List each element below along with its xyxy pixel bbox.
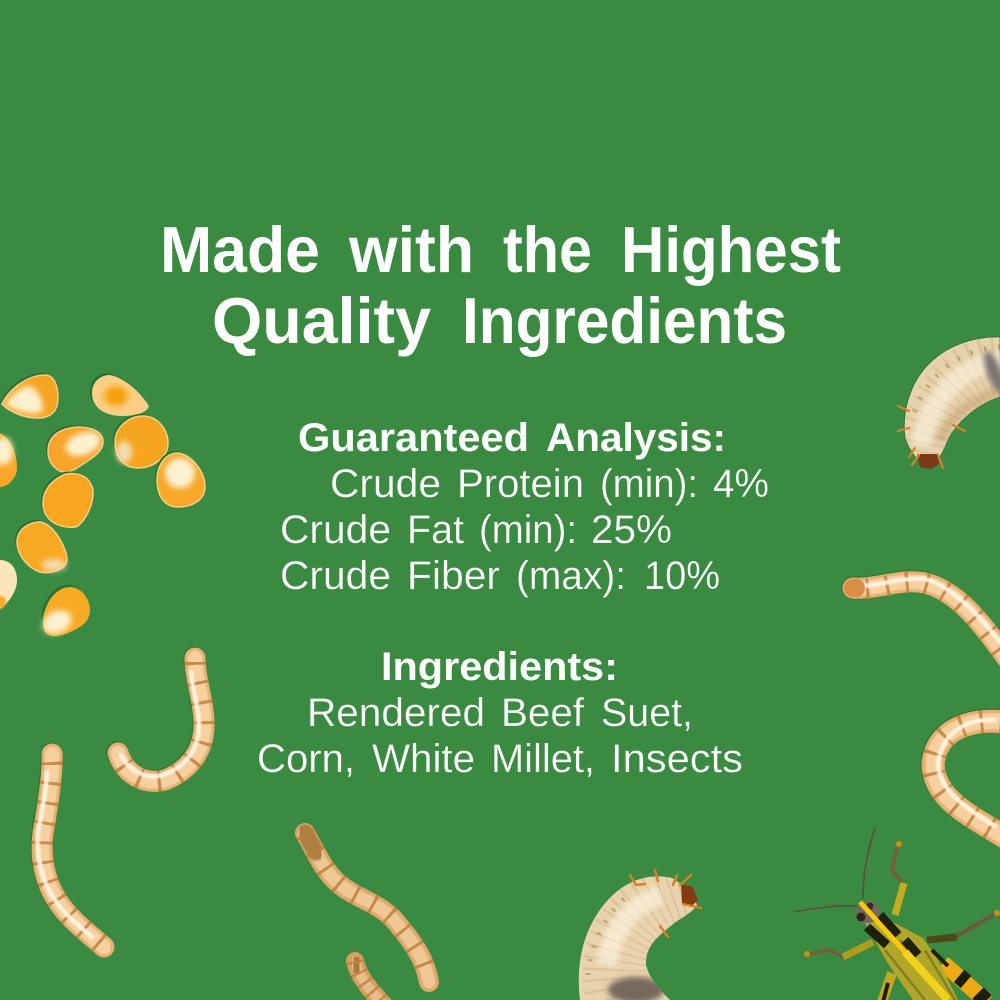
kernel 9 [0, 560, 17, 609]
title: Quality [212, 284, 431, 357]
text block: ingredients: Millet, [491, 737, 595, 781]
text block: guaranteed analysis: Protein [457, 462, 584, 506]
dark stripes [867, 915, 918, 955]
body [865, 917, 958, 1000]
text block: ingredients: Corn, [257, 737, 355, 781]
text block: guaranteed analysis: 10% [644, 554, 720, 598]
kernel 8 [15, 520, 67, 572]
kernel 10 [39, 585, 90, 638]
kernel 7 [0, 433, 17, 487]
title: Highest [621, 213, 841, 286]
grub head [917, 454, 939, 469]
title: with [348, 213, 474, 286]
mealworm: right curled [932, 720, 1000, 838]
text block: guaranteed analysis: (min): [479, 508, 577, 552]
mealworm: J-shaped [117, 657, 204, 781]
head [856, 901, 880, 923]
text block: guaranteed analysis: Guaranteed [298, 416, 529, 460]
kernel 6 [41, 472, 93, 527]
text block: guaranteed analysis [280, 416, 769, 598]
kernel 3 [46, 425, 104, 472]
title [160, 213, 841, 357]
text block: ingredients: Ingredients: [381, 645, 618, 689]
text block: guaranteed analysis: Crude [280, 508, 391, 552]
text block: ingredients: Beef [501, 691, 585, 735]
mealworm: left tall [38, 753, 104, 947]
text block: ingredients: Insects [611, 737, 743, 781]
kernel 5 [155, 451, 205, 507]
leg feet [804, 841, 1000, 957]
text block: ingredients: Rendered [307, 691, 485, 735]
text block: guaranteed analysis: 4% [713, 462, 769, 506]
kernel 4 [113, 414, 168, 468]
text block: guaranteed analysis: Crude [280, 554, 391, 598]
grub legs [898, 406, 965, 468]
legs [892, 847, 904, 885]
grub: bottom center [579, 870, 701, 1000]
text block: guaranteed analysis: Fat [407, 508, 464, 552]
text block: guaranteed analysis: Analysis: [546, 416, 726, 460]
title: Ingredients [462, 284, 787, 357]
grub: top right [898, 337, 1000, 469]
corn kernels [0, 373, 205, 638]
text block: guaranteed analysis: 25% [591, 508, 672, 552]
title: Made [160, 213, 320, 286]
text block: guaranteed analysis: Crude [330, 462, 441, 506]
text block: ingredients: White [372, 737, 475, 781]
yellow stripe [860, 902, 905, 952]
antennae [794, 828, 875, 912]
title: the [503, 213, 592, 286]
mealworm: bottom center [305, 833, 429, 982]
text block: guaranteed analysis: Fiber [407, 554, 500, 598]
text block: ingredients [257, 645, 743, 781]
text block: ingredients: Suet, [601, 691, 693, 735]
mealworm: right middle [852, 579, 1000, 657]
grub legs [630, 870, 701, 937]
hind leg [943, 963, 987, 1000]
grasshopper [794, 828, 1000, 1000]
text block: guaranteed analysis: (min): [600, 462, 698, 506]
kernel 1 [0, 373, 58, 418]
kernel 2 [90, 373, 149, 416]
mealworm: bottom small [355, 961, 385, 1000]
text block: guaranteed analysis: (max): [516, 554, 626, 598]
grub head [681, 885, 698, 906]
